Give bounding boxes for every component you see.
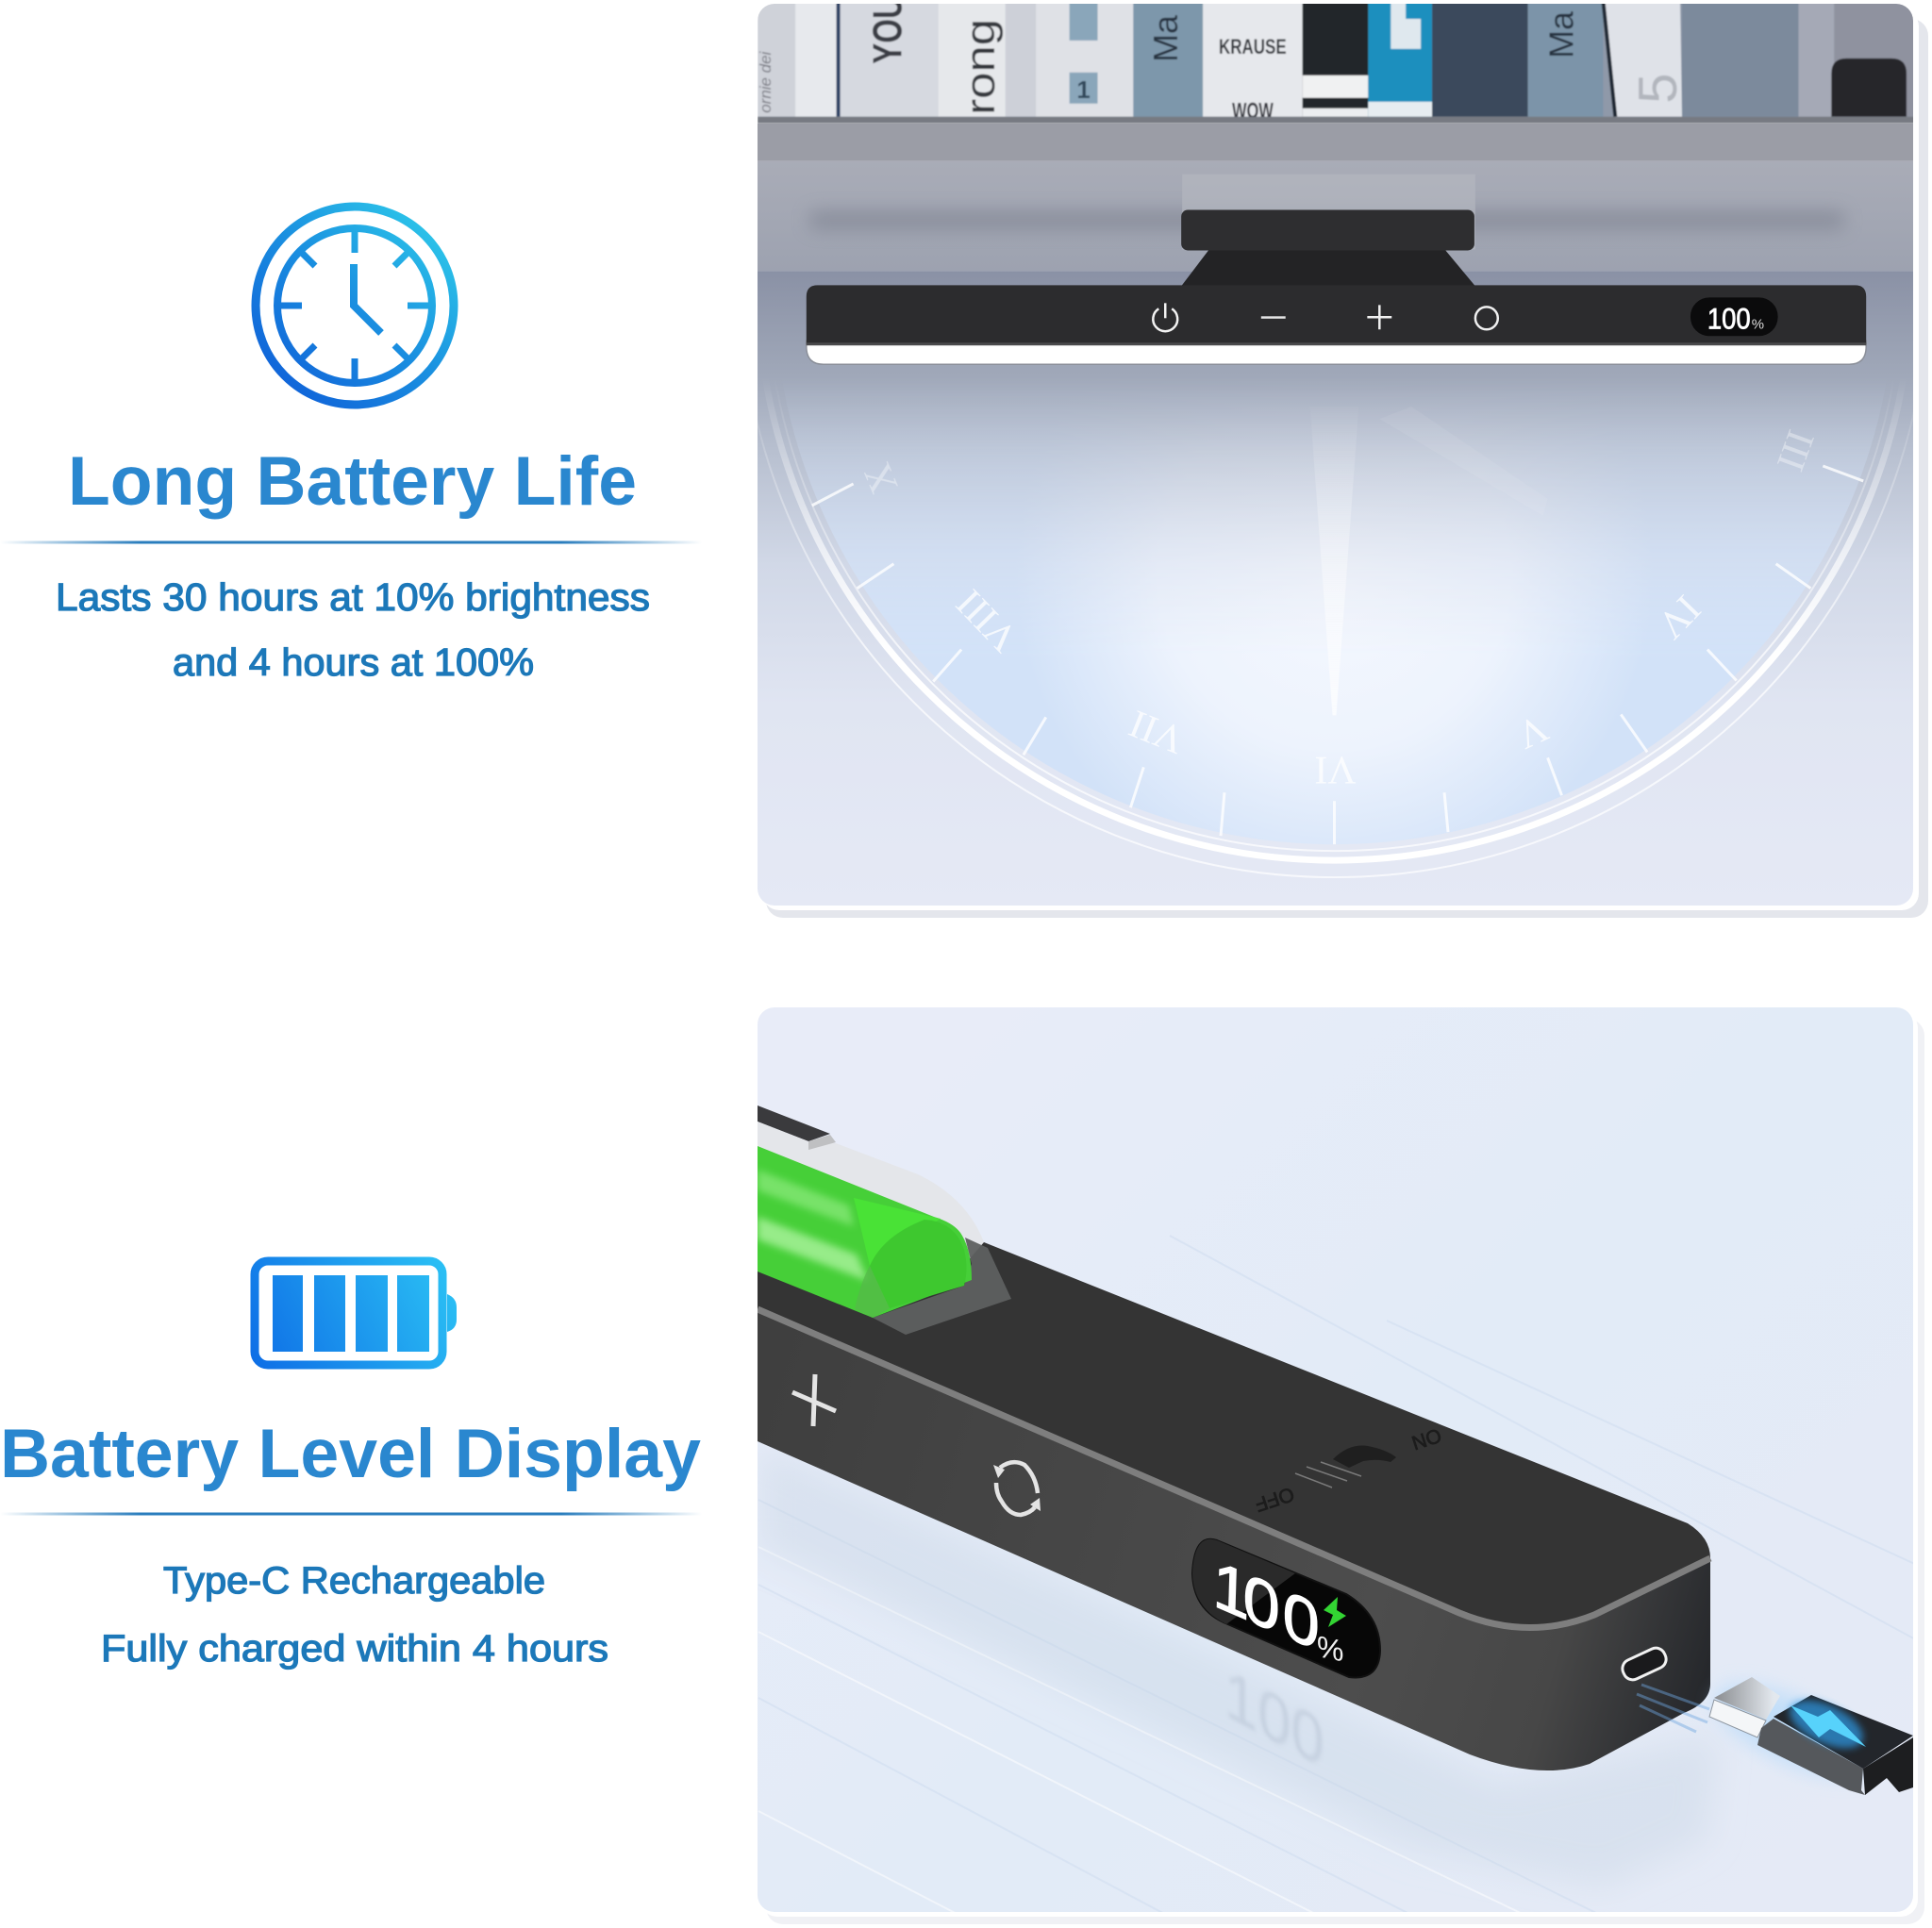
green battery cell: [758, 1146, 972, 1318]
clock disc: [792, 413, 1875, 844]
clock numerals: IV: [1649, 587, 1708, 647]
battery display: %: [1317, 1629, 1343, 1669]
clock numerals: X: [856, 457, 908, 500]
battery readout: %: [1752, 316, 1764, 332]
panel: lamp under shelf with clock: [741, 0, 1928, 918]
icon: mode ring: [1475, 307, 1498, 329]
bar silver edge: [758, 1309, 1710, 1628]
bookshelf with books: 5: [1628, 74, 1689, 104]
power switch: ON: [1408, 1423, 1444, 1454]
bookshelf with books: WOW: [1232, 99, 1274, 125]
icon: refresh: [993, 1462, 1041, 1515]
heading: Long Battery Life: Long Battery Life: [68, 443, 637, 520]
icon: lightning bolt: [1782, 1690, 1871, 1758]
text block: charging details: Type-C Rechargeable: [163, 1560, 545, 1602]
battery readout: [1690, 297, 1778, 336]
clock numerals: VI: [1314, 747, 1357, 790]
clock numerals: [856, 424, 1822, 790]
bookshelf with books: rong: [958, 19, 1004, 115]
light streaks: [758, 1236, 1919, 1917]
USB-C port: [1620, 1645, 1669, 1683]
text block: charging details: Fully charged within 4 hours: [101, 1628, 608, 1670]
icon: plus: [1367, 305, 1391, 329]
battery readout: 100: [1707, 301, 1751, 335]
text block: charging details: [101, 1560, 608, 1670]
clock hands: [1310, 407, 1548, 715]
lamp mount: [1181, 175, 1475, 286]
charging cable: [1702, 1666, 1913, 1796]
text block: battery life details: [56, 575, 650, 684]
text block: battery life details: and 4 hours at 100%: [173, 640, 534, 684]
heading: Battery Level Display: Battery Level Display: [0, 1416, 701, 1492]
bookshelf with books: Ma: [1147, 15, 1185, 62]
bookshelf with books: [757, 0, 1923, 125]
panel: battery cross-section and charging port: [758, 1007, 1924, 1924]
clock numerals: V: [1510, 706, 1555, 756]
clock numerals: VIII: [948, 581, 1026, 660]
bar front face: [758, 1309, 1710, 1770]
clock rings: [758, 406, 1913, 878]
lamp bar: [807, 285, 1866, 364]
bookshelf with books: KRAUSE: [1219, 35, 1287, 58]
battery display: 100: [1212, 1545, 1321, 1665]
clock numerals: VII: [1124, 701, 1191, 762]
bookshelf with books: Ma: [1542, 11, 1580, 58]
bookshelf with books: 1: [1076, 77, 1091, 104]
battery compartment: [758, 1105, 1011, 1335]
icon: minus: [1261, 316, 1286, 319]
text block: battery life details: Lasts 30 hours at 10% brightness: [56, 575, 650, 619]
icon: clock: [256, 207, 454, 405]
icon: battery: [255, 1261, 457, 1365]
bar top face: [758, 1226, 1710, 1628]
power switch: OFF: [1252, 1483, 1297, 1516]
clock numerals: III: [1768, 424, 1822, 476]
power switch: [1252, 1423, 1444, 1516]
shelf front: [758, 124, 1923, 161]
bar reflection: [758, 1443, 1717, 1886]
clock tick marks: [812, 466, 1863, 844]
icon: power: [1153, 303, 1177, 331]
panel: battery cross-section and charging port: 100: [1224, 1654, 1324, 1783]
bookshelf with books: ornie dei: [757, 50, 774, 113]
icon: plus: [792, 1374, 836, 1426]
battery display: [1192, 1539, 1380, 1677]
charging streaks: [1637, 1685, 1709, 1732]
